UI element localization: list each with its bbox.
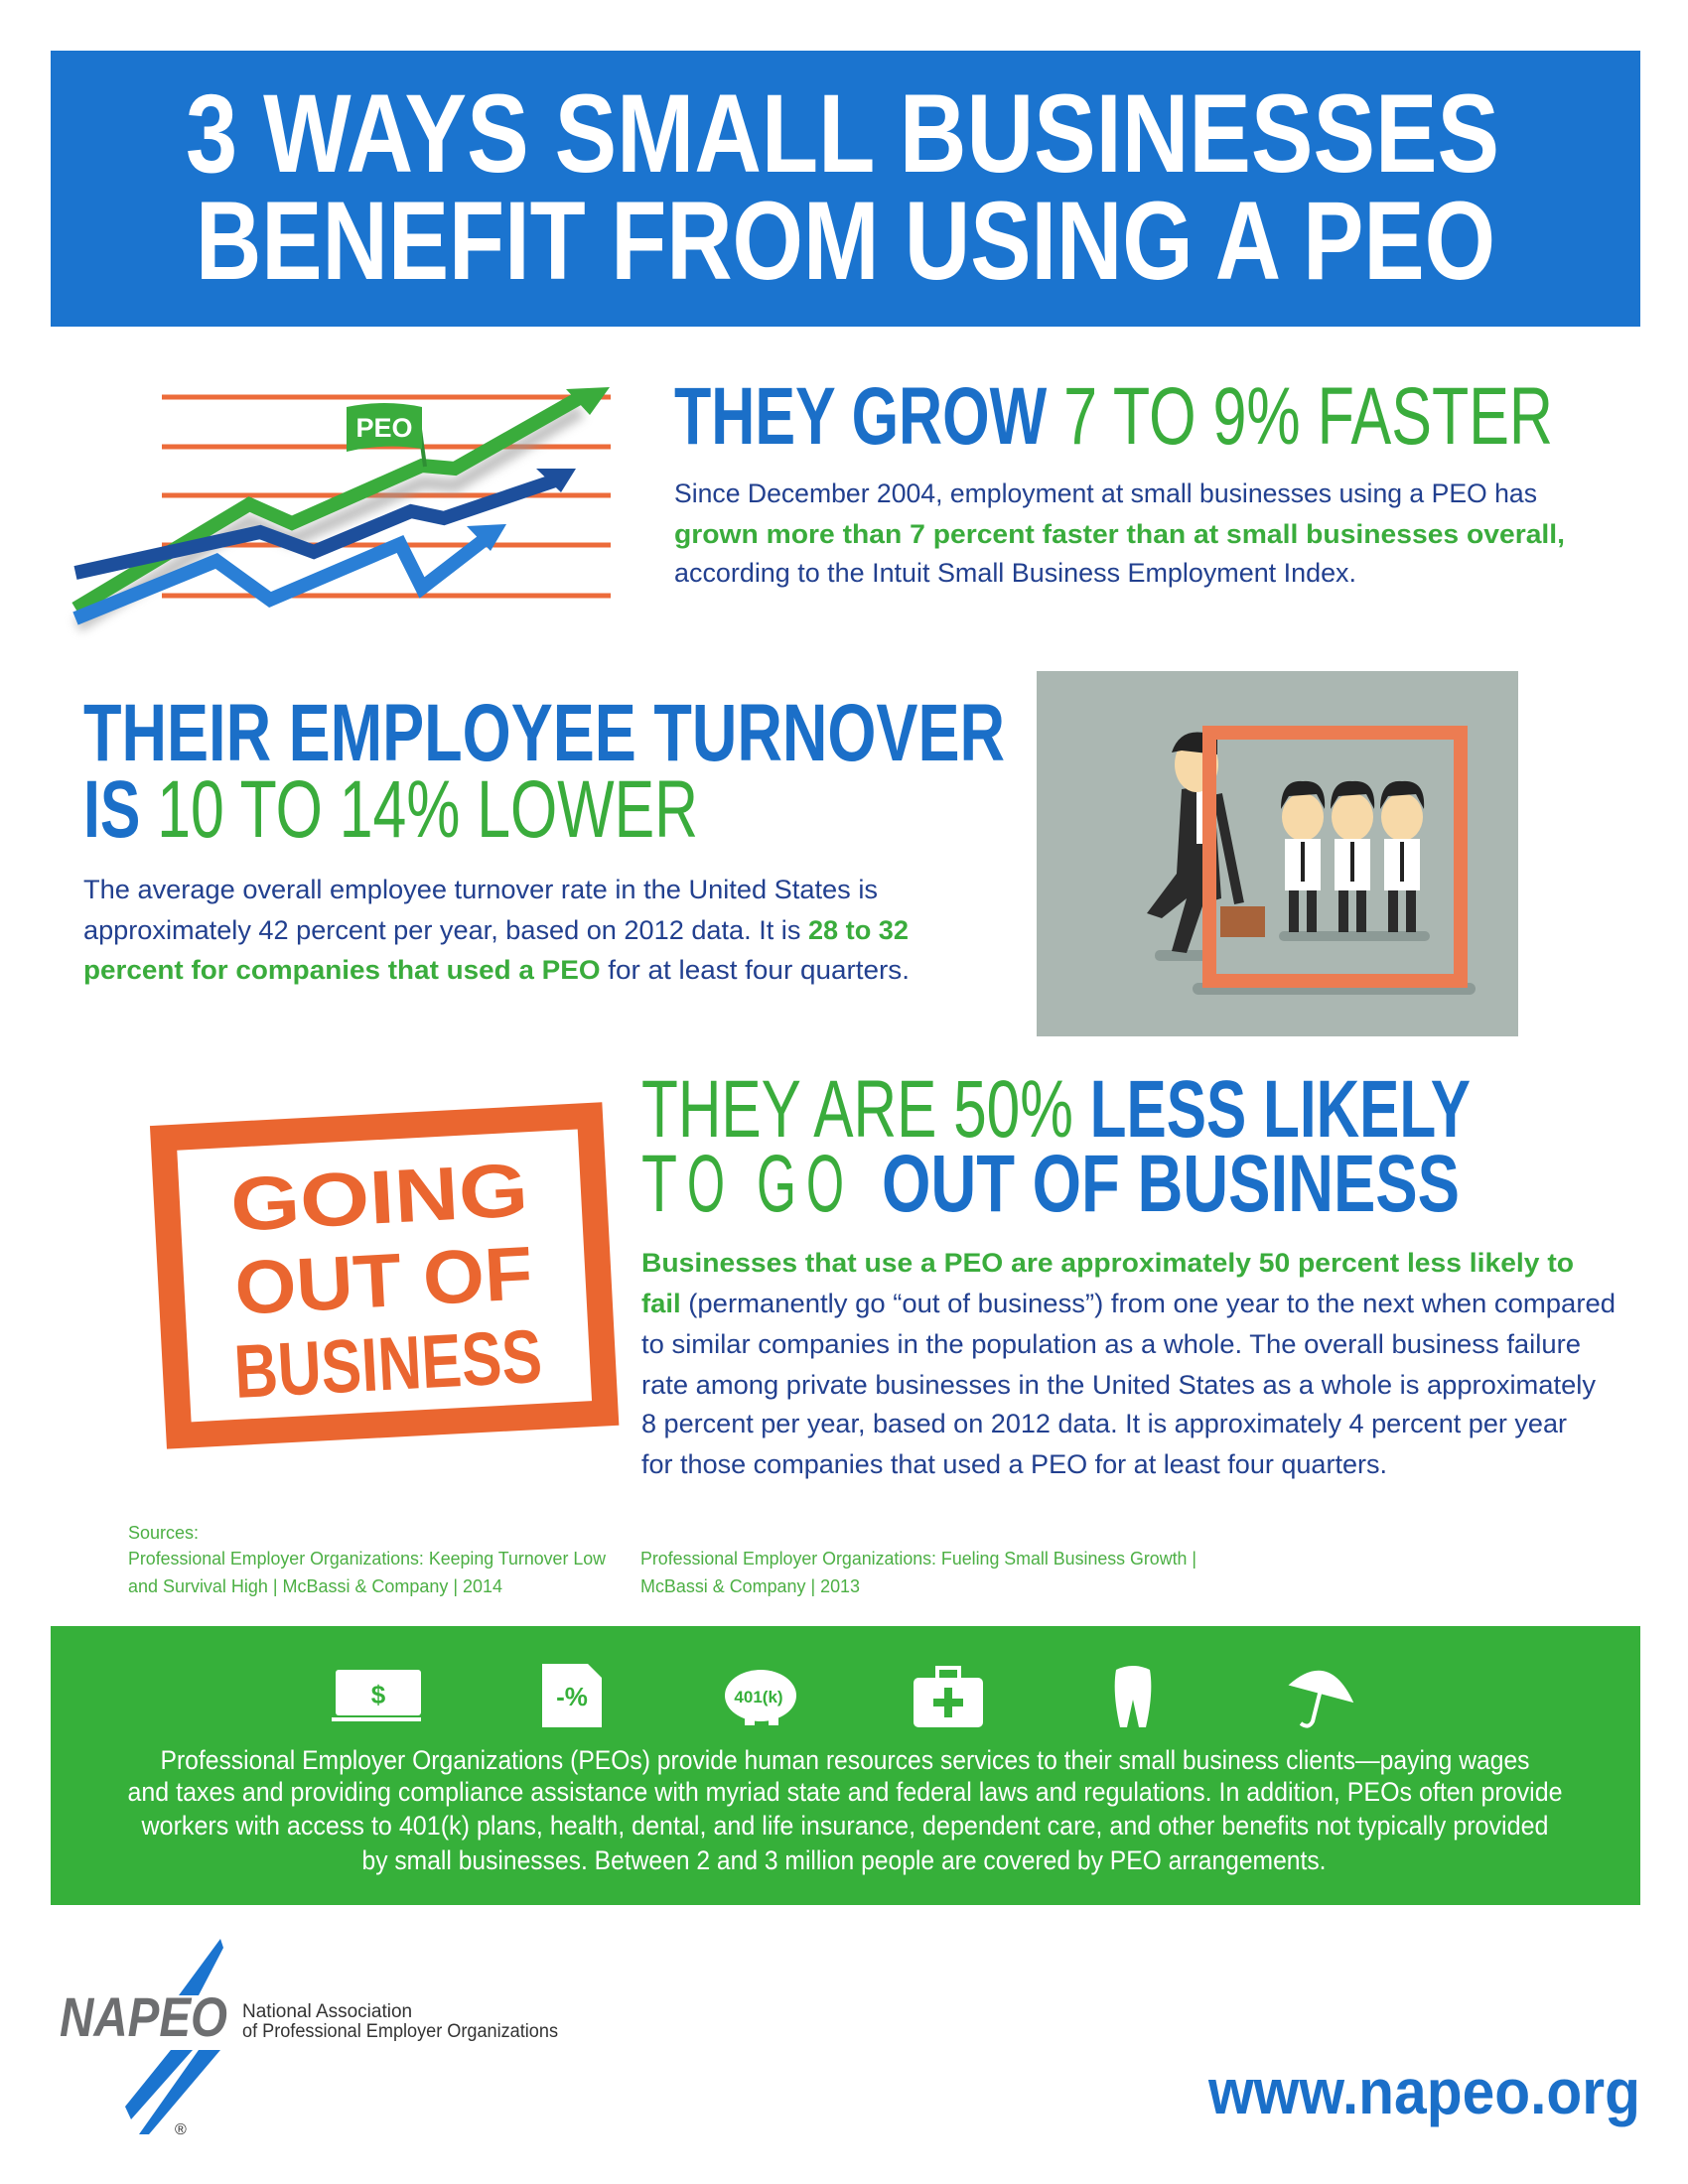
logo: NAPEO: ®: [175, 2121, 187, 2138]
stamp: going out of business: OUT OF: [232, 1231, 534, 1331]
icon: percent doc: -%: [556, 1682, 588, 1711]
icon: tooth: [1115, 1666, 1151, 1727]
logo: NAPEO: of Professional Employer Organizations: [242, 2021, 558, 2042]
text: turnover body: The average overall employee turnover rate in the United States is: [83, 875, 878, 904]
text: PEO description: Professional Employer Organizations (PEOs) provide human resources services to their small business clients—paying wages: [161, 1745, 1529, 1775]
sources: and Survival High | McBassi & Company | 2014: [128, 1576, 502, 1596]
heading: less likely: G: [757, 1139, 796, 1229]
heading: less likely: O: [687, 1139, 725, 1229]
text: less likely body: 8 percent per year, based on 2012 data. It is approximately 4 percent per year: [641, 1409, 1567, 1438]
PEO flag: [347, 403, 425, 467]
icon: first aid kit: [914, 1668, 983, 1727]
text: grow body: [674, 478, 1565, 588]
stamp: going out of business: BUSINESS: [232, 1314, 544, 1415]
heading: turnover: THEIR EMPLOYEE TURNOVER: [83, 688, 1005, 778]
icon: piggy bank 401k: 401(k): [734, 1688, 783, 1706]
icon: money: $: [371, 1680, 386, 1709]
text: PEO description: by small businesses. Between 2 and 3 million people are covered by PEO arrangements.: [361, 1845, 1327, 1875]
icon: money: [332, 1670, 421, 1721]
text: PEO description: and taxes and providing compliance assistance with myriad state and federal laws and regulations. In addition, PEOs often provide: [127, 1777, 1563, 1807]
text: less likely body: rate among private businesses in the United States as a whole is approximately: [641, 1370, 1596, 1400]
header banner: [51, 51, 1640, 327]
sources: McBassi & Company | 2013: [640, 1576, 860, 1596]
stamp: going out of business: [164, 1116, 606, 1435]
text: grow body: Since December 2004, employment at small businesses using a PEO has: [674, 478, 1537, 508]
PEO flag: PEO: [355, 413, 413, 443]
green band: PEO services: [51, 1626, 1640, 1905]
text: turnover body: percent for companies that used a PEO for at least four quarters.: [83, 955, 910, 985]
text: less likely body: for those companies that used a PEO for at least four quarters.: [641, 1449, 1387, 1479]
sources: Sources:: [128, 1523, 199, 1543]
heading: less likely: O: [806, 1139, 844, 1229]
stamp: going out of business: GOING: [228, 1148, 530, 1248]
logo: NAPEO: National Association: [242, 2001, 412, 2022]
icon: umbrella: [1289, 1663, 1359, 1726]
text: PEO description: [127, 1745, 1563, 1875]
three men: [1281, 781, 1424, 932]
sources: Professional Employer Organizations: Fueling Small Business Growth |: [640, 1549, 1196, 1569]
url: www.napeo.org: [1207, 2056, 1640, 2127]
sources: Professional Employer Organizations: Keeping Turnover Low: [128, 1549, 607, 1569]
icon: percent doc: [542, 1664, 602, 1727]
chart: growth lines: [75, 387, 611, 625]
logo: NAPEO: [60, 1939, 558, 2138]
text: grow body: according to the Intuit Small Business Employment Index.: [674, 558, 1356, 588]
sources: [128, 1523, 1196, 1596]
walking man: [1147, 733, 1265, 953]
door frame: [1209, 733, 1461, 981]
heading: less likely: OUT OF BUSINESS: [882, 1139, 1460, 1229]
text: grow body: grown more than 7 percent faster than at small businesses overall,: [674, 519, 1565, 549]
heading: turnover: IS 10 TO 14% LOWER: [83, 764, 698, 855]
title: [186, 71, 1499, 303]
heading: less likely: THEY ARE 50% LESS LIKELY: [641, 1064, 1471, 1155]
heading: less likely: T: [641, 1139, 677, 1229]
text: less likely body: Businesses that use a PEO are approximately 50 percent less likely to: [641, 1248, 1574, 1278]
heading: less likely: [641, 1064, 1471, 1229]
text: less likely body: to similar companies in the population as a whole. The overall business failure: [641, 1329, 1581, 1359]
text: less likely body: [641, 1248, 1616, 1479]
text: turnover body: [83, 875, 910, 985]
illustration: employees and door: [1037, 671, 1518, 1036]
text: PEO description: workers with access to 401(k) plans, health, dental, and life insurance, dependent care, and other benefits not typically provided: [141, 1811, 1548, 1841]
text: turnover body: approximately 42 percent per year, based on 2012 data. It is 28 to 32: [83, 915, 909, 945]
heading: turnover: [83, 688, 1005, 855]
icon: piggy bank 401k: [725, 1670, 796, 1725]
logo: NAPEO: NAPEO: [60, 1985, 227, 2048]
text: less likely body: fail (permanently go “out of business”) from one year to the next when compared: [641, 1289, 1616, 1318]
